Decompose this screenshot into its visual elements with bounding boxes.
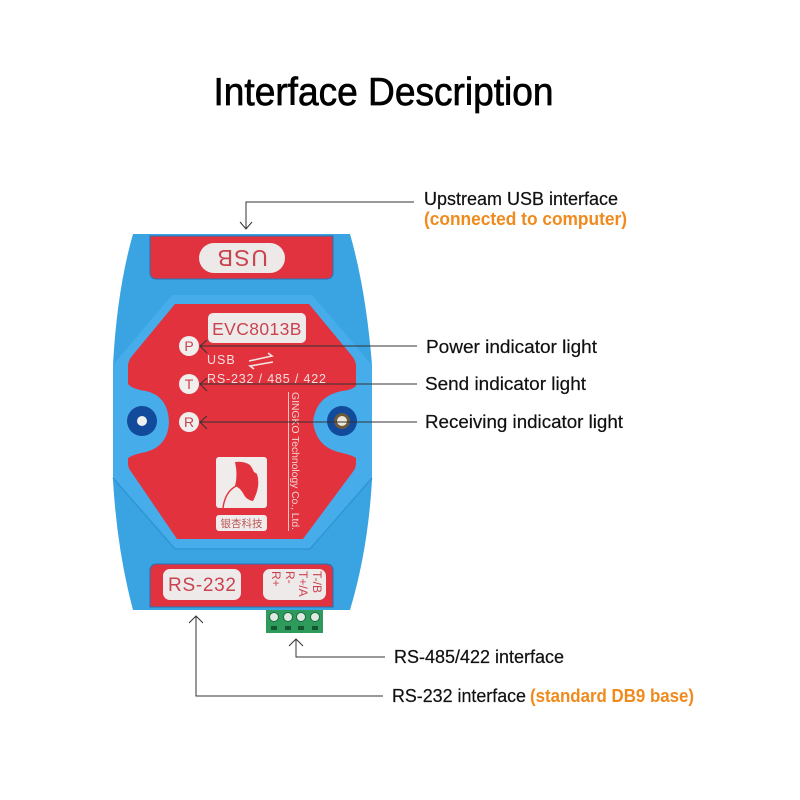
lower wedge shadow edges [113,478,372,549]
device: USB converter [113,234,372,633]
label: RS-232: (standard DB9 base) [530,686,694,706]
label: send: Send indicator light [425,374,586,394]
terminal block [266,610,323,633]
red center panel [128,304,356,539]
blue housing [113,234,372,610]
logo [216,457,267,531]
label: RS-485: RS-485/422 interface [394,647,564,667]
model label: EVC8013B [212,319,302,339]
USB red label [150,236,333,279]
arrow: USB [240,202,414,229]
arrow: RS-485 [289,639,385,657]
indicator R [179,412,199,432]
label: RS-232 [392,686,694,706]
model label [208,313,306,343]
terminal labels: T-/B [310,571,324,593]
USB text and arrows: USB [207,353,236,367]
company text: GINGKO Technology Co., Ltd. [289,392,301,530]
terminal labels: R+ [269,571,283,587]
arrow: RS-232 [189,616,383,696]
bottom red label [150,564,333,607]
label: USB interface [424,189,627,229]
label: power: Power indicator light [426,337,597,357]
terminal labels: T+/A [296,571,310,597]
arrow: send [200,378,417,391]
label: USB interface: Upstream USB interface [424,189,618,209]
indicator P: P [184,338,194,354]
arrow: receive [200,416,417,429]
RS-232 label: RS-232 [168,575,236,596]
label: receive: Receiving indicator light [425,412,623,432]
indicator T [179,374,199,394]
right screw [327,406,357,436]
indicator P [179,336,199,356]
RS-232 label [163,569,241,600]
RS label: RS-232 / 485 / 422 [207,372,326,386]
raised rim [113,295,372,549]
terminal labels [263,569,326,600]
indicator R: R [184,414,194,430]
indicator T: T [185,376,194,392]
USB text and arrows [207,353,273,369]
USB red label: USB [216,245,268,271]
arrow: power [200,340,417,353]
terminal labels: R- [283,571,297,584]
title: Interface Description [214,71,554,114]
label: RS-232: RS-232 interface [392,686,526,706]
logo: 银杏科技 [220,517,263,530]
label: USB interface: (connected to computer) [424,209,627,229]
left screw [127,406,157,436]
